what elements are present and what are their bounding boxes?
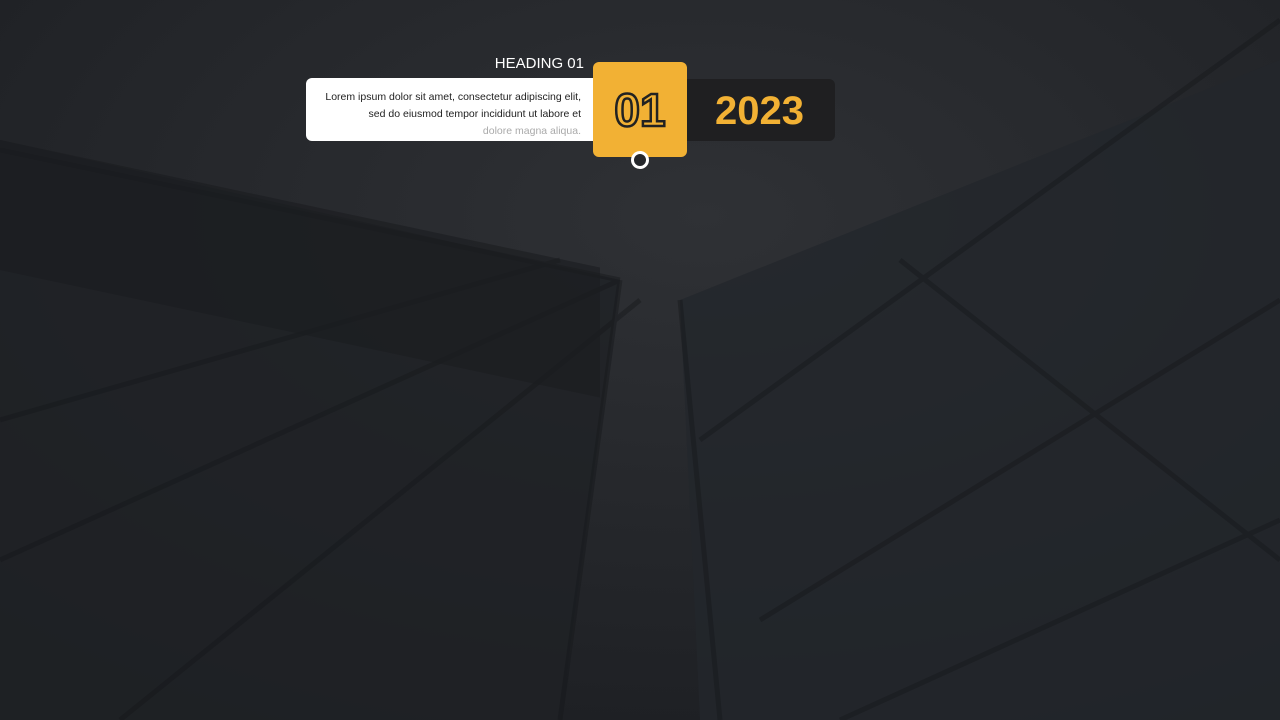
year box: 2023 bbox=[715, 89, 804, 133]
number badge bbox=[593, 62, 687, 157]
number badge: 01 bbox=[614, 84, 666, 136]
heading: HEADING 01 bbox=[495, 55, 584, 72]
timeline marker bbox=[631, 151, 649, 169]
text card bbox=[306, 78, 606, 141]
text card: dolore magna aliqua. bbox=[483, 125, 581, 137]
year box bbox=[680, 79, 835, 141]
text card: sed do eiusmod tempor incididunt ut labore et bbox=[369, 108, 581, 120]
text card: Lorem ipsum dolor sit amet, consectetur adipiscing elit, bbox=[325, 91, 581, 103]
